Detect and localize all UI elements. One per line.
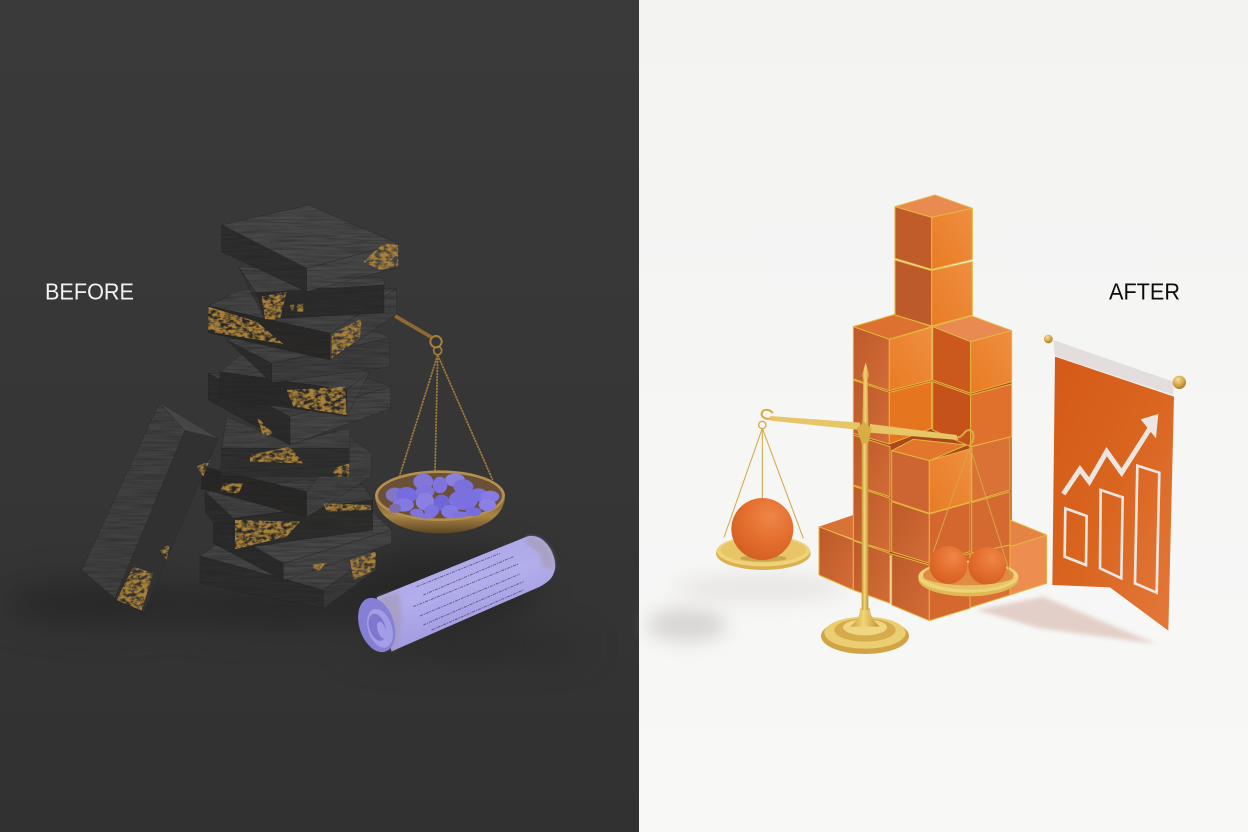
right pan [918,447,1018,596]
stand base [821,608,909,654]
parchment scroll [352,536,555,657]
worn edges [527,537,554,570]
broken beam [395,316,432,337]
chains [398,355,493,480]
block 10 [238,267,385,319]
banner rod strip [1053,340,1173,395]
block 9 [208,288,397,360]
block 5 [221,417,350,477]
rod finials [1044,335,1053,343]
upper left cube [853,314,932,391]
block 8 [227,323,390,383]
orange cube tower [819,195,1047,621]
scroll handwriting [413,553,523,630]
plinth [819,380,1047,595]
floor shadows [647,573,1157,644]
block 11 top [222,205,398,292]
block 4 [201,437,372,517]
left pan [716,428,811,570]
panel: before background [0,0,639,832]
block 7 [219,355,370,416]
pan [375,498,505,533]
small orange spheres [929,546,967,584]
block 6 [208,373,391,445]
label: before: BEFORE [45,278,134,304]
lower middle cubes [892,437,1010,621]
middle row cubes [853,380,1012,447]
gold balance scale [716,363,1018,654]
beam [770,416,958,440]
scroll end spiral [352,593,402,657]
stacked dark blocks [200,205,398,608]
chart icon: bars [1065,466,1159,593]
panel: after scene [647,195,1186,654]
lower column left [853,435,890,603]
upper right cube [933,316,1012,393]
leaning block [82,403,218,613]
panel: after background [639,0,1248,832]
large orange sphere [731,498,793,560]
block 1 [200,543,377,608]
balance scale pan with rocks [375,316,505,533]
gold flecks on blocks [208,243,398,580]
growth banner flag [1044,335,1186,631]
stand pole and finial [862,437,868,610]
block 3 [205,480,373,549]
floor shadow [3,550,587,655]
chart icon: rising line with arrow [1063,414,1158,494]
second top cube [895,260,972,326]
purple rocks [386,473,499,519]
banner body [1052,357,1174,631]
panel: before scene [3,205,587,657]
top cube [895,195,972,269]
block 2 [213,510,392,581]
front cube [892,439,972,513]
label: after: AFTER [1109,278,1180,304]
